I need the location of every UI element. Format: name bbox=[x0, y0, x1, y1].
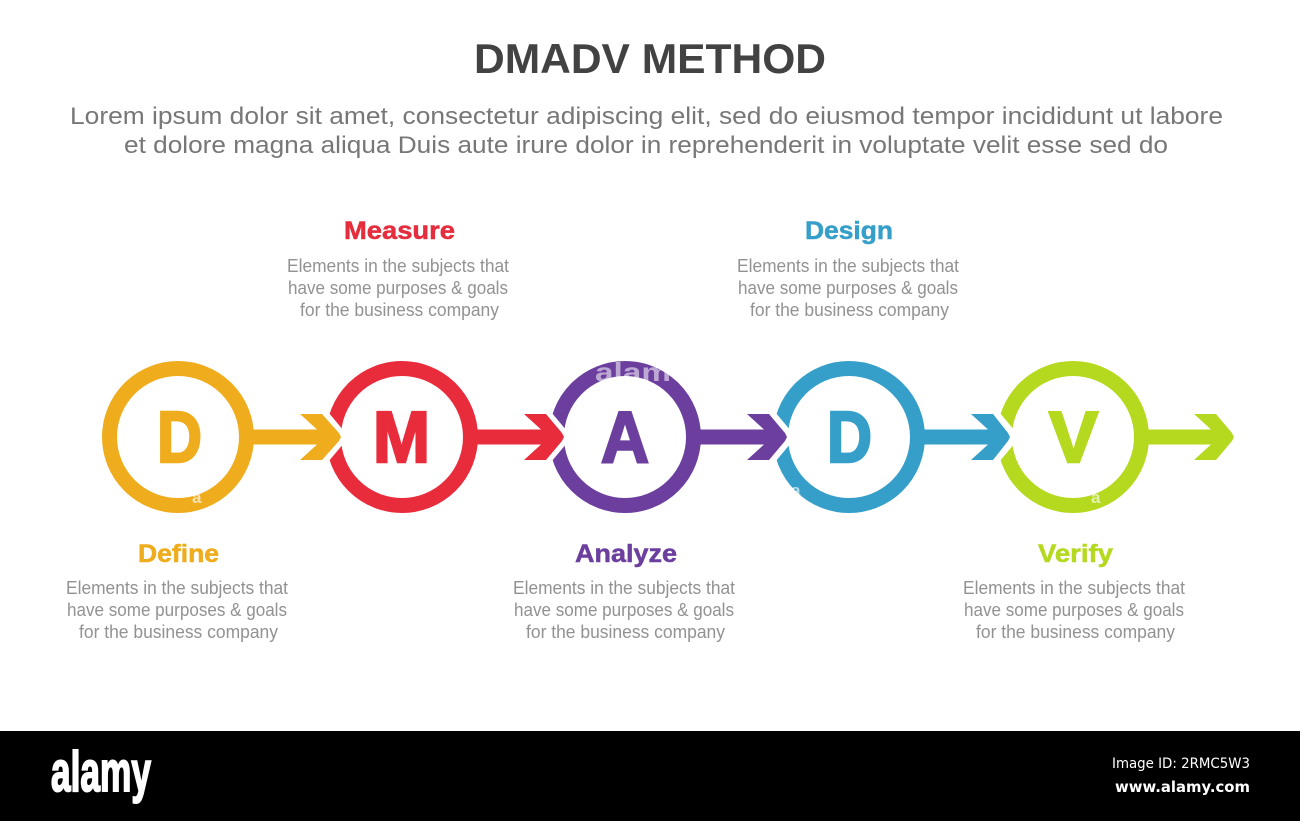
description: design: have some purposes & goals bbox=[738, 278, 958, 298]
description: define: for the business company bbox=[79, 622, 278, 642]
panel: verify text bbox=[963, 540, 1185, 642]
description: analyze: for the business company bbox=[526, 622, 725, 642]
panel: define text bbox=[66, 540, 288, 642]
watermark fragment: a bbox=[791, 481, 801, 500]
letter: V: V bbox=[1049, 398, 1098, 478]
step A: analyze circle and arrow bbox=[505, 357, 694, 506]
description: measure bbox=[287, 256, 509, 320]
description: design: Elements in the subjects that bbox=[737, 256, 959, 276]
description: analyze: Elements in the subjects that bbox=[513, 578, 735, 598]
panel: analyze text bbox=[513, 540, 735, 642]
circle: M bbox=[334, 368, 470, 506]
heading: verify: Verify bbox=[1038, 540, 1113, 568]
gap in ring bbox=[505, 400, 572, 474]
description: analyze: have some purposes & goals bbox=[514, 600, 734, 620]
description: verify: Elements in the subjects that bbox=[963, 578, 1185, 598]
description: measure: for the business company bbox=[300, 300, 499, 320]
arrow: measure to analyze bbox=[472, 414, 564, 460]
watermark fragment: a bbox=[1091, 488, 1101, 507]
description: define: Elements in the subjects that bbox=[66, 578, 288, 598]
step D: design circle and arrow bbox=[729, 368, 918, 506]
circle: V bbox=[1004, 368, 1142, 506]
arrow: design to verify bbox=[919, 414, 1010, 460]
gap in ring bbox=[729, 400, 796, 474]
step V: verify circle and arrow bbox=[953, 368, 1142, 507]
panel: design text bbox=[737, 217, 959, 320]
letter: M: M bbox=[373, 398, 430, 478]
description: define: have some purposes & goals bbox=[67, 600, 287, 620]
circle: D bbox=[780, 368, 918, 506]
description: measure: have some purposes & goals bbox=[288, 278, 508, 298]
watermark fragment: alam bbox=[595, 357, 671, 387]
description: verify: have some purposes & goals bbox=[964, 600, 1184, 620]
heading: define: Define bbox=[138, 540, 219, 568]
heading: measure: Measure bbox=[344, 217, 455, 245]
gap in ring bbox=[953, 400, 1020, 474]
gap in ring bbox=[282, 400, 349, 474]
arrow: analyze to design bbox=[695, 414, 787, 460]
description: analyze bbox=[513, 578, 735, 642]
image id: Image ID: 2RMC5W3 bbox=[1112, 756, 1250, 772]
website: www.alamy.com bbox=[1115, 778, 1250, 796]
intro text block bbox=[70, 103, 1223, 159]
title: DMADV METHOD bbox=[474, 35, 826, 82]
circle: A bbox=[556, 368, 694, 506]
intro text block: et dolore magna aliqua Duis aute irure dolor in reprehenderit in voluptate velit esse sed do bbox=[124, 132, 1168, 159]
step M: measure circle and arrow bbox=[282, 368, 470, 506]
letter: D: D bbox=[157, 398, 202, 478]
description: verify: for the business company bbox=[976, 622, 1175, 642]
circle: D bbox=[110, 368, 246, 506]
description: verify bbox=[963, 578, 1185, 642]
arrow: verify outgoing bbox=[1143, 414, 1234, 460]
panel: measure text bbox=[287, 217, 509, 320]
description: measure: Elements in the subjects that bbox=[287, 256, 509, 276]
heading: analyze: Analyze bbox=[575, 540, 677, 568]
description: define bbox=[66, 578, 288, 642]
description: design: for the business company bbox=[750, 300, 949, 320]
heading: design: Design bbox=[805, 217, 893, 245]
watermark fragment: a bbox=[192, 488, 202, 507]
footer logo: alamy bbox=[51, 740, 151, 804]
description: design bbox=[737, 256, 959, 320]
step D: define circle and arrow bbox=[110, 368, 246, 507]
arrow: define to measure bbox=[248, 414, 341, 460]
intro text block: Lorem ipsum dolor sit amet, consectetur adipiscing elit, sed do eiusmod tempor incididunt ut labore bbox=[70, 103, 1223, 130]
letter: A: A bbox=[601, 398, 649, 478]
letter: D: D bbox=[827, 398, 872, 478]
footer bar bbox=[0, 731, 1300, 821]
